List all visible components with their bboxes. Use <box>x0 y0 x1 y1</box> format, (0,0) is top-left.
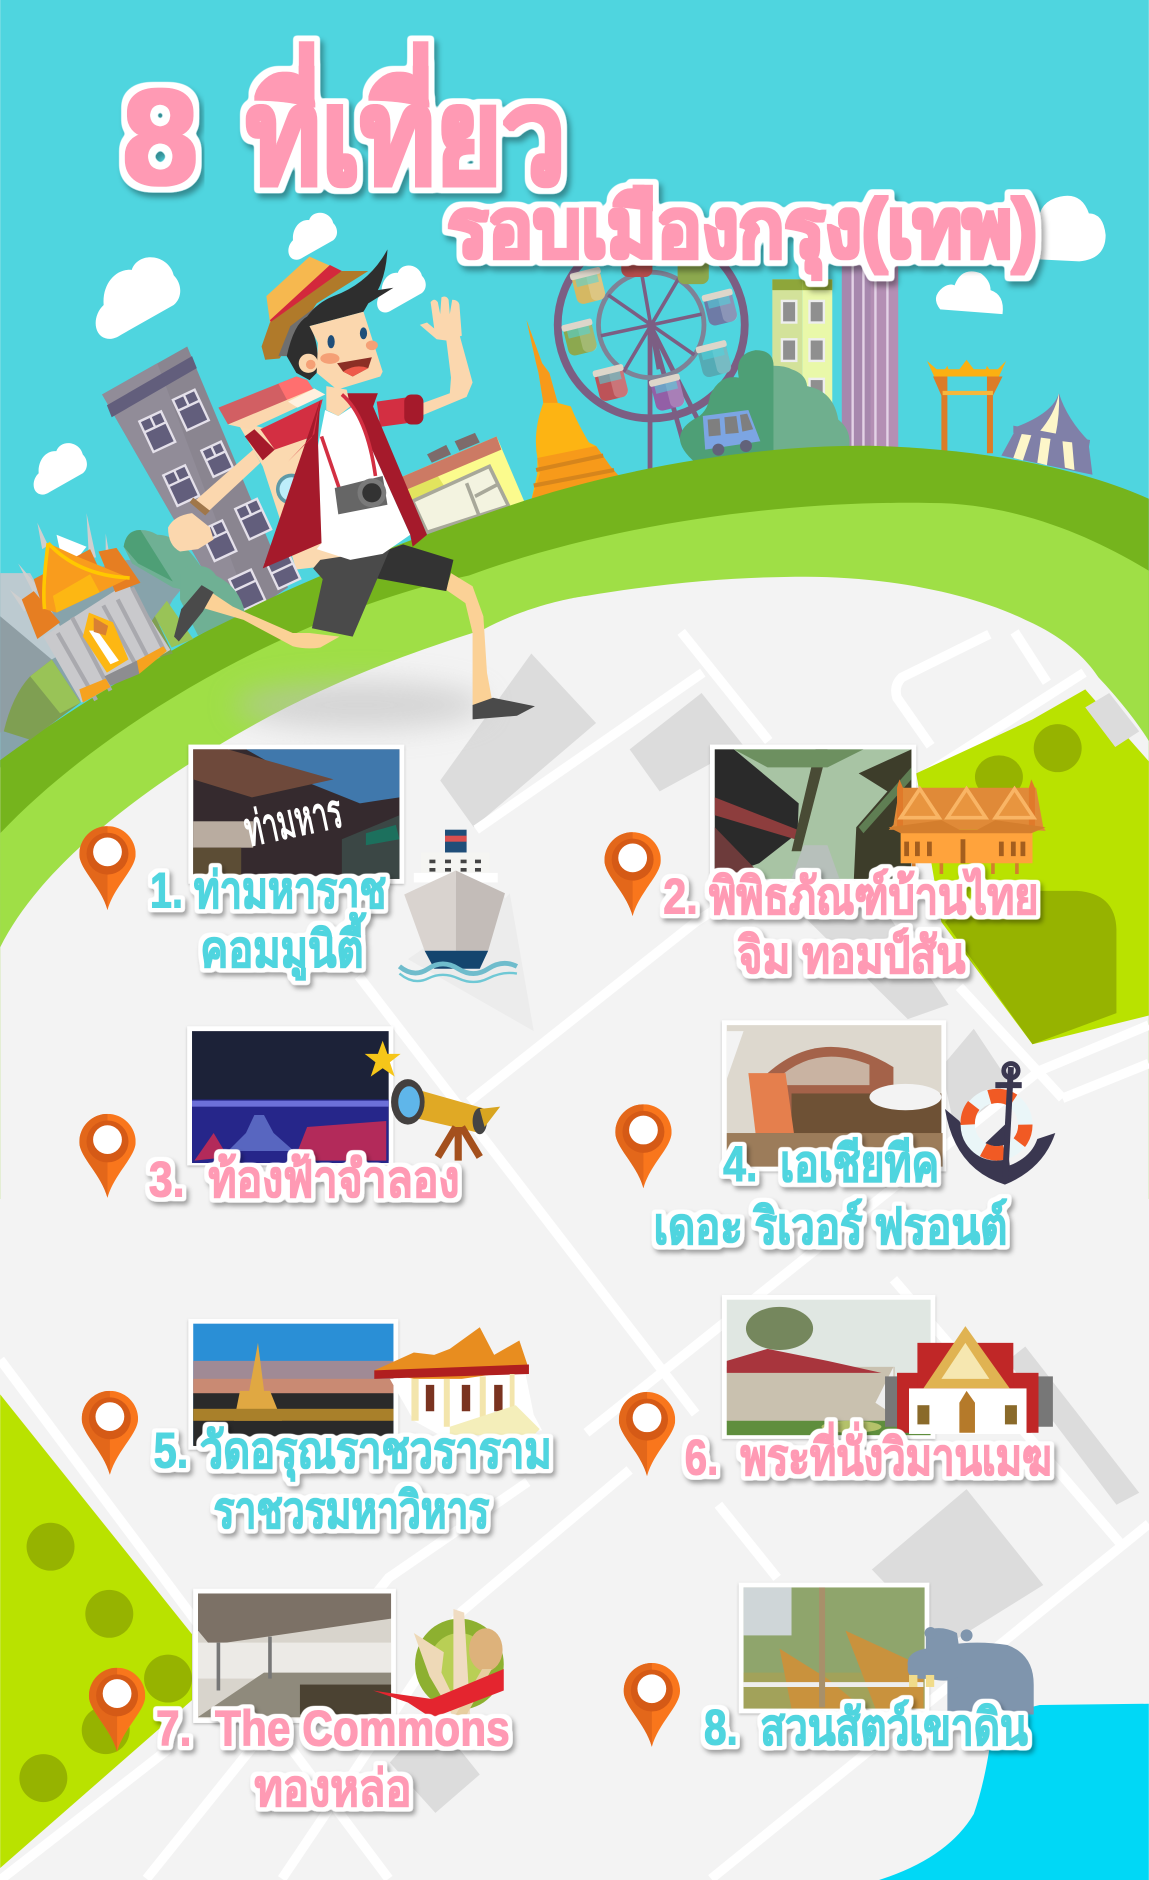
cutlery icon <box>373 1609 504 1718</box>
runner shadow <box>234 681 486 729</box>
white map roads <box>0 632 1149 1880</box>
thai house icon <box>889 779 1046 874</box>
place 2 <box>604 747 1046 983</box>
place 1 <box>79 747 534 1031</box>
label 8: 8. สวนสัตว์เขาดิน <box>704 1699 1028 1756</box>
label 4: เดอะ ริเวอร์ ฟรอนต์ <box>654 1197 1007 1254</box>
camera and straps <box>322 436 340 489</box>
hair <box>287 249 393 380</box>
photo 3 <box>190 1029 391 1163</box>
neck <box>326 386 350 416</box>
beige building and red roof <box>236 421 348 570</box>
grey map blocks <box>390 653 1139 1813</box>
sky background <box>0 0 1149 767</box>
label 1 <box>150 862 386 980</box>
hat <box>266 257 342 323</box>
giant swing <box>927 360 1006 453</box>
ferris wheel <box>558 231 745 472</box>
pin 5 <box>82 1391 138 1475</box>
place 7 <box>89 1591 510 1817</box>
water <box>879 1704 1149 1880</box>
white shirt <box>317 406 410 560</box>
title line 1: 8 <box>122 62 198 212</box>
face details <box>328 335 335 348</box>
raised arm <box>423 335 473 415</box>
left hill and temple <box>4 513 193 740</box>
pin 7 <box>89 1668 145 1752</box>
temple body <box>43 583 170 703</box>
label 2: 2. พิพิธภัณฑ์บ้านไทย <box>663 867 1039 925</box>
yellow building <box>398 436 524 532</box>
title line 1 <box>122 42 566 212</box>
park bottom left <box>0 1394 192 1868</box>
temple door <box>83 613 128 673</box>
temple spires <box>10 513 110 611</box>
park top right <box>916 689 1149 1044</box>
photo 4 <box>724 1023 944 1169</box>
head <box>310 312 383 390</box>
striped tent <box>1001 393 1092 475</box>
place 4 <box>615 1023 1055 1254</box>
pin 4 <box>615 1104 672 1188</box>
pin 1 <box>79 826 136 910</box>
photo 1 <box>191 747 402 881</box>
bus <box>703 410 760 456</box>
photo 2 <box>712 747 914 881</box>
golden stupa <box>527 320 619 500</box>
pin 8 <box>624 1663 680 1747</box>
front leg and shoe <box>446 573 493 705</box>
map ground <box>0 577 1149 1880</box>
label 5: 5. วัดอรุณราชวราราม <box>154 1422 552 1482</box>
place 3 <box>79 1029 500 1208</box>
label 3: 3. ท้องฟ้าจำลอง <box>149 1151 459 1208</box>
ship shadow <box>462 893 534 1031</box>
star <box>365 1041 401 1077</box>
anchor and ring icon <box>945 1063 1055 1185</box>
hippo icon <box>908 1627 1034 1715</box>
place 5 <box>82 1321 552 1538</box>
title line 2: รอบเมืองกรุง(เทพ) <box>447 184 1037 280</box>
label 7 <box>156 1700 510 1817</box>
label 7: ทองหล่อ <box>254 1760 411 1817</box>
label 7: 7. The Commons <box>156 1700 510 1757</box>
photo 1: ท่ามหาร <box>240 785 347 857</box>
label 5 <box>154 1422 552 1538</box>
tower blocks <box>842 257 898 448</box>
palace icon <box>885 1326 1053 1434</box>
pin 3 <box>79 1114 136 1198</box>
temple icon <box>374 1327 542 1435</box>
label 2 <box>663 867 1039 983</box>
photo 6 <box>724 1297 933 1436</box>
pin 6 <box>619 1392 675 1476</box>
pin 2 <box>604 832 661 916</box>
temple base <box>79 646 167 703</box>
skyline buildings <box>0 231 1092 767</box>
right sleeve <box>377 397 410 427</box>
label 6: 6. พระที่นั่งวิมานเมฆ <box>685 1422 1052 1486</box>
place 8 <box>624 1585 1034 1756</box>
label 4: 4. เอเชียทีค <box>723 1135 939 1192</box>
clouds <box>34 196 1106 495</box>
hill: dark green band <box>0 446 1149 1199</box>
photo 7 <box>196 1591 393 1721</box>
shorts <box>374 544 453 591</box>
place 6 <box>619 1297 1053 1486</box>
photo 8 <box>741 1585 927 1711</box>
tree behind bus <box>680 350 850 463</box>
character: traveller <box>168 249 535 719</box>
label 4 <box>654 1135 1007 1254</box>
left sleeve <box>260 399 323 450</box>
label 1: 1. ท่ามหาราช <box>150 862 386 919</box>
label 1: คอมมูนิตี้ <box>200 911 366 980</box>
label 5: ราชวรมหาวิหาร <box>214 1481 489 1538</box>
hill: light green band <box>0 503 1149 1199</box>
back leg and shoe <box>203 592 340 648</box>
label 2: จิม ทอมป์สัน <box>738 926 965 983</box>
telescope icon <box>391 1079 500 1161</box>
jacket <box>263 399 322 568</box>
photo 5 <box>191 1321 396 1447</box>
title line 1: ที่เที่ยว <box>246 42 566 212</box>
temple roofs <box>34 549 102 605</box>
grey tower <box>102 347 300 623</box>
back tree <box>124 530 228 599</box>
mountains behind temple <box>0 560 200 767</box>
front tree near runner <box>180 565 245 635</box>
lower arm and hand <box>193 450 260 514</box>
ship icon <box>399 830 517 982</box>
